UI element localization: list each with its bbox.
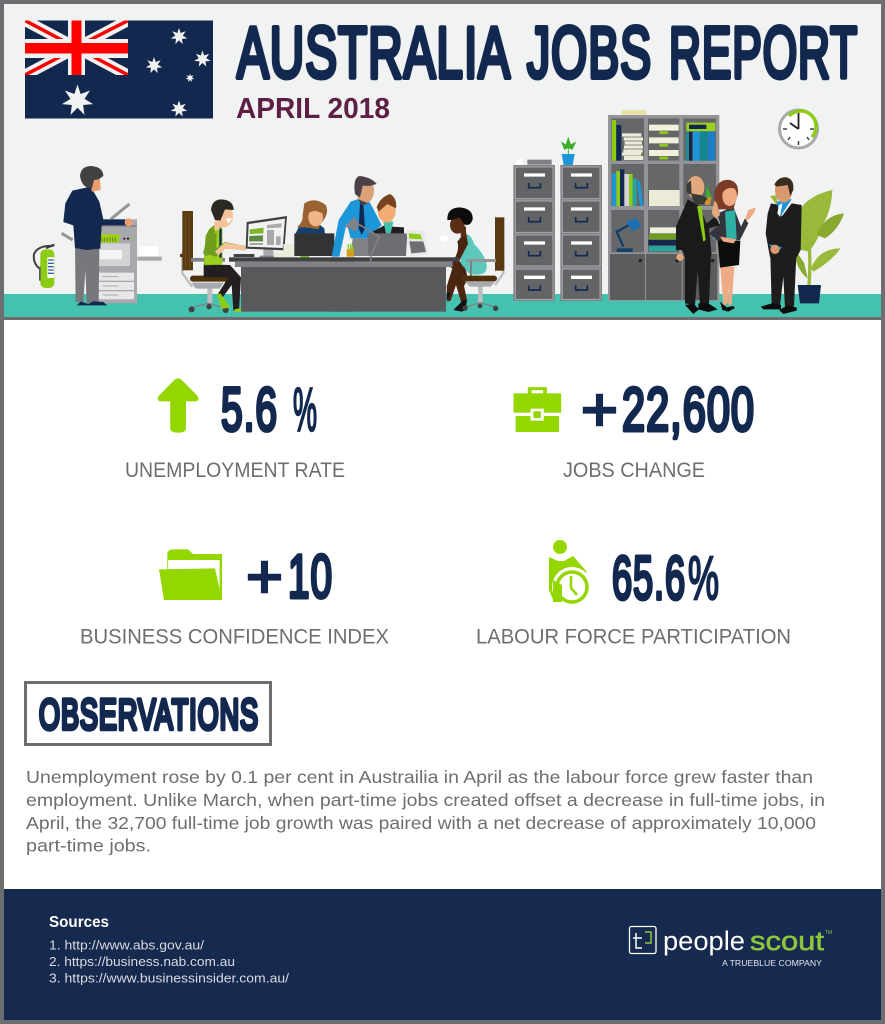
logo: peoplescout: A TRUEBLUE COMPANY bbox=[722, 958, 822, 968]
stat: jobs change bbox=[514, 376, 755, 482]
value: % bbox=[688, 544, 719, 613]
icon: up arrow bbox=[158, 378, 199, 433]
panel: header background bbox=[4, 4, 881, 320]
label: JOBS CHANGE bbox=[563, 459, 705, 482]
sources list bbox=[49, 914, 289, 986]
value: + bbox=[581, 376, 618, 444]
text block: observations paragraph bbox=[26, 767, 825, 856]
filing cabinet left bbox=[513, 159, 555, 301]
man in blue shirt bbox=[332, 176, 382, 257]
logo: peoplescout: TM bbox=[825, 930, 832, 936]
laptop bbox=[367, 233, 407, 256]
illustration: desk with man at monitor and woman at laptop bbox=[180, 199, 355, 313]
value: + bbox=[246, 542, 283, 612]
logo: peoplescout: scout bbox=[750, 926, 825, 956]
icon: briefcase bbox=[514, 389, 561, 432]
text block: observations paragraph: April, the 32,700 full-time job growth was paired with a net decrease of approximately 10,000 bbox=[26, 813, 816, 833]
leafy plant in navy pot bbox=[770, 190, 844, 303]
value: 65.6 bbox=[612, 544, 686, 613]
icon: fire extinguisher bbox=[34, 245, 54, 288]
title bbox=[237, 12, 858, 94]
woman drinking coffee bbox=[440, 207, 487, 312]
desk bbox=[229, 257, 355, 312]
label: UNEMPLOYMENT RATE bbox=[125, 459, 345, 482]
woman with laptop bbox=[294, 200, 334, 256]
sources list: Sources bbox=[49, 914, 109, 931]
value bbox=[581, 376, 755, 444]
paper stack and green mug bbox=[274, 244, 311, 257]
label: BUSINESS CONFIDENCE INDEX bbox=[80, 626, 389, 648]
man behind laptop bbox=[373, 194, 404, 235]
office chair bbox=[462, 217, 504, 311]
label: LABOUR FORCE PARTICIPATION bbox=[476, 626, 791, 648]
value: 5.6 bbox=[221, 376, 278, 444]
subtitle: date: APRIL 2018 bbox=[236, 93, 390, 125]
desk bbox=[330, 257, 459, 312]
photocopier bbox=[62, 204, 162, 303]
sources list: 3. https://www.businessinsider.com.au/ bbox=[49, 970, 289, 986]
value: 10 bbox=[288, 542, 333, 612]
illustration: man at photocopier with fire extinguisher bbox=[34, 166, 162, 305]
title: AUSTRALIA bbox=[237, 12, 511, 94]
blue desk lamp bbox=[617, 218, 642, 252]
stat: labour force participation bbox=[476, 540, 791, 648]
desk lamp bbox=[345, 217, 379, 265]
potted plant on cabinet bbox=[562, 138, 575, 165]
bookcase bbox=[608, 110, 719, 301]
text block: observations paragraph: Unemployment rose by 0.1 per cent in Austrailia in April as the labour force grew faster than bbox=[26, 767, 813, 787]
heading: observations bbox=[26, 682, 270, 744]
books and binders bbox=[612, 120, 715, 251]
filing cabinet right bbox=[560, 165, 602, 301]
office chair bbox=[180, 211, 229, 313]
sources list: 1. http://www.abs.gov.au/ bbox=[49, 938, 204, 952]
tablet with chart bbox=[406, 230, 429, 256]
seated man in green shirt bbox=[203, 199, 246, 312]
value: 22,600 bbox=[622, 376, 755, 444]
title: JOBS bbox=[527, 12, 652, 94]
sources list: 2. https://business.nab.com.au bbox=[49, 954, 235, 969]
pencil cup bbox=[347, 243, 354, 257]
illustration: desk right side with two men and woman bbox=[330, 176, 504, 312]
bald bearded man in black suit bbox=[676, 176, 720, 314]
man with arms crossed bbox=[761, 177, 802, 314]
icon: Australian flag bbox=[25, 20, 213, 118]
woman in teal top and black skirt bbox=[709, 180, 756, 312]
stat: unemployment rate: % bbox=[293, 376, 317, 444]
icon: wall clock bbox=[778, 108, 819, 150]
value bbox=[246, 542, 333, 612]
heading: observations: OBSERVATIONS bbox=[39, 692, 259, 739]
computer monitor bbox=[234, 216, 287, 258]
text block: observations paragraph: employment. Unlike March, when part-time jobs created offset a decrease in full-time jobs, in bbox=[26, 790, 825, 810]
stat: unemployment rate bbox=[125, 376, 345, 482]
logo: peoplescout: people bbox=[663, 926, 745, 956]
panel: footer bbox=[4, 889, 881, 1020]
illustration: three colleagues and plant bbox=[676, 176, 844, 314]
text block: observations paragraph: part-time jobs. bbox=[26, 836, 151, 856]
standing man in navy jacket bbox=[63, 166, 133, 305]
illustration: filing cabinets and bookcase bbox=[513, 110, 719, 301]
stat: business confidence index bbox=[80, 542, 389, 648]
logo: peoplescout bbox=[630, 926, 832, 968]
icon: folder bbox=[159, 549, 222, 600]
icon: person with clock bbox=[549, 540, 592, 607]
